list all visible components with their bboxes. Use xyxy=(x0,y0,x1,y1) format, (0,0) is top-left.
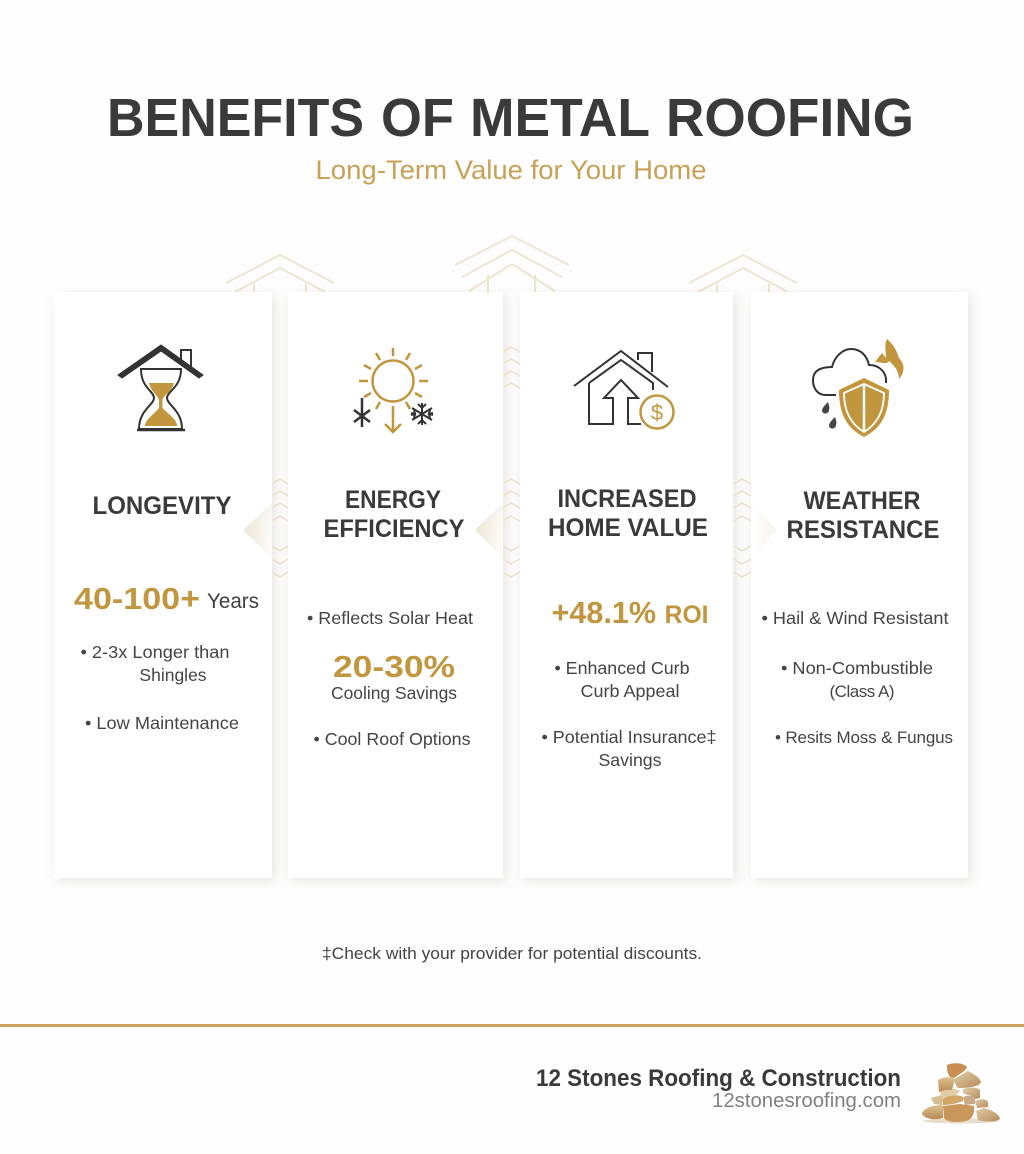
title: METAL xyxy=(470,88,650,148)
bullets: • Enhanced Curb xyxy=(554,658,690,678)
heading: HOME VALUE xyxy=(548,514,708,542)
stat: +48.1% ROI xyxy=(552,595,708,630)
bullets: (Class A) xyxy=(830,682,894,701)
heading xyxy=(324,486,465,543)
icon: house with arrow and dollar: $ xyxy=(651,400,663,425)
bullets: • Potential Insurance‡ xyxy=(542,727,716,747)
stat xyxy=(331,649,457,703)
title: OF xyxy=(381,88,454,148)
heading: LONGEVITY xyxy=(92,492,232,520)
decorative roof outlines behind the cards xyxy=(226,236,797,292)
title xyxy=(107,88,914,148)
icon: stone pile logo xyxy=(922,1063,1000,1124)
bullets xyxy=(542,658,716,770)
icon: sun and snowflake xyxy=(354,348,433,432)
bullet: cool roof: • Cool Roof Options xyxy=(314,729,471,749)
bullets xyxy=(762,608,953,747)
card background xyxy=(288,292,503,878)
bullets: Savings xyxy=(598,750,662,770)
heading: WEATHER xyxy=(804,487,920,515)
stat xyxy=(74,581,259,616)
bullets: • Resits Moss & Fungus xyxy=(775,728,953,747)
stat: 40-100+ xyxy=(74,581,200,616)
stat: Years xyxy=(207,590,259,613)
bullets: • Hail & Wind Resistant xyxy=(762,608,949,628)
heading xyxy=(548,485,708,542)
stat: 20-30% xyxy=(333,649,455,684)
heading xyxy=(786,487,940,544)
icon: house with hourglass xyxy=(118,345,203,430)
panel: increased home value xyxy=(520,292,733,878)
icon: cloud, shield and flame xyxy=(813,339,904,437)
heading: RESISTANCE xyxy=(786,516,940,544)
card background xyxy=(54,292,272,878)
bullets: Curb Appeal xyxy=(580,681,680,701)
heading: INCREASED xyxy=(558,485,696,513)
title: ROOFING xyxy=(666,88,914,148)
bullet: solar heat: • Reflects Solar Heat xyxy=(307,608,473,628)
footer company name: 12 Stones Roofing & Construction xyxy=(536,1065,901,1092)
card background xyxy=(520,292,733,878)
bullets: • Low Maintenance xyxy=(85,713,239,733)
panel: energy efficiency xyxy=(288,292,503,878)
heading: EFFICIENCY xyxy=(324,515,465,543)
heading: ENERGY xyxy=(345,486,441,514)
card background xyxy=(751,292,968,878)
footer divider xyxy=(0,1024,1024,1027)
panel: weather resistance xyxy=(751,292,968,878)
bullets xyxy=(80,642,239,733)
footer website: 12stonesroofing.com xyxy=(712,1090,901,1112)
bullets: Shingles xyxy=(139,665,207,685)
bullets: • 2-3x Longer than xyxy=(80,642,230,662)
stat: Cooling Savings xyxy=(331,683,457,703)
footnote: ‡Check with your provider for potential discounts. xyxy=(322,944,702,963)
bullets: • Non-Combustible xyxy=(781,658,933,678)
subtitle: Long-Term Value for Your Home xyxy=(316,155,706,185)
decorative chevrons between the cards xyxy=(272,347,751,577)
icon: house with arrow and dollar xyxy=(574,351,674,428)
connector arrows between the cards xyxy=(243,503,777,558)
title: BENEFITS xyxy=(107,88,364,148)
panel: longevity xyxy=(54,292,272,878)
